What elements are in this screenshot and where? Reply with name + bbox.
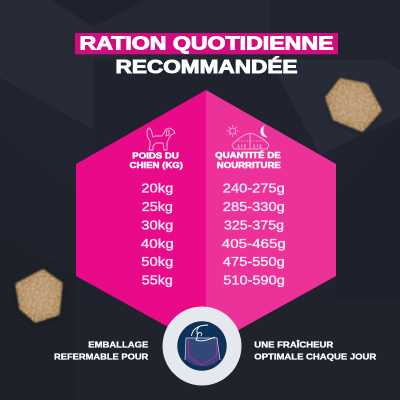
table: food quantities: 285-330g <box>223 200 285 214</box>
icon: dog <box>147 128 175 150</box>
table: dog weights: 25kg <box>142 200 173 214</box>
table: dog weights: 20kg <box>141 182 173 196</box>
icon: resealable bag badge <box>162 306 242 386</box>
text: right caption <box>254 338 376 361</box>
table: food quantities: 405-465g <box>222 237 286 251</box>
icon: kibble right <box>325 80 382 134</box>
panel: pink hexagon <box>76 90 336 348</box>
text: left caption: REFERMABLE POUR <box>54 351 148 361</box>
heading: weight column: CHIEN (KG) <box>130 160 183 170</box>
table: food quantities: 475-550g <box>223 255 285 269</box>
heading: weight column <box>130 150 183 170</box>
icon: sun, moon and bowl: 1/2 <box>253 144 262 150</box>
table: dog weights: 55kg <box>142 274 173 288</box>
table: food quantities: 240-275g <box>223 182 285 196</box>
title line 2: RECOMMANDÉE <box>116 56 298 77</box>
table: food quantities: 510-590g <box>223 274 285 288</box>
icon: sun, moon and bowl <box>227 125 269 150</box>
text: right caption: UNE FRAÎCHEUR <box>254 338 333 349</box>
text: right caption: OPTIMALE CHAQUE JOUR <box>254 351 376 361</box>
table: dog weights <box>141 182 174 288</box>
title <box>75 33 338 77</box>
icon: kibble left <box>15 271 63 325</box>
title highlight: pink banner: RATION QUOTIDIENNE <box>80 34 334 54</box>
heading: food column <box>215 150 281 170</box>
icon: sun, moon and bowl: 1/2 <box>237 144 247 150</box>
heading: weight column: POIDS DU <box>132 150 179 160</box>
table: food quantities: 325-375g <box>224 218 284 232</box>
text: left caption: EMBALLAGE <box>88 339 149 349</box>
table: dog weights: 30kg <box>141 218 173 232</box>
heading: food column: NOURRITURE <box>217 160 281 170</box>
table: food quantities <box>222 182 286 288</box>
heading: food column: QUANTITÉ DE <box>215 150 281 160</box>
table: dog weights: 50kg <box>141 255 173 269</box>
text: left caption <box>54 339 149 361</box>
table: dog weights: 40kg <box>141 237 174 251</box>
